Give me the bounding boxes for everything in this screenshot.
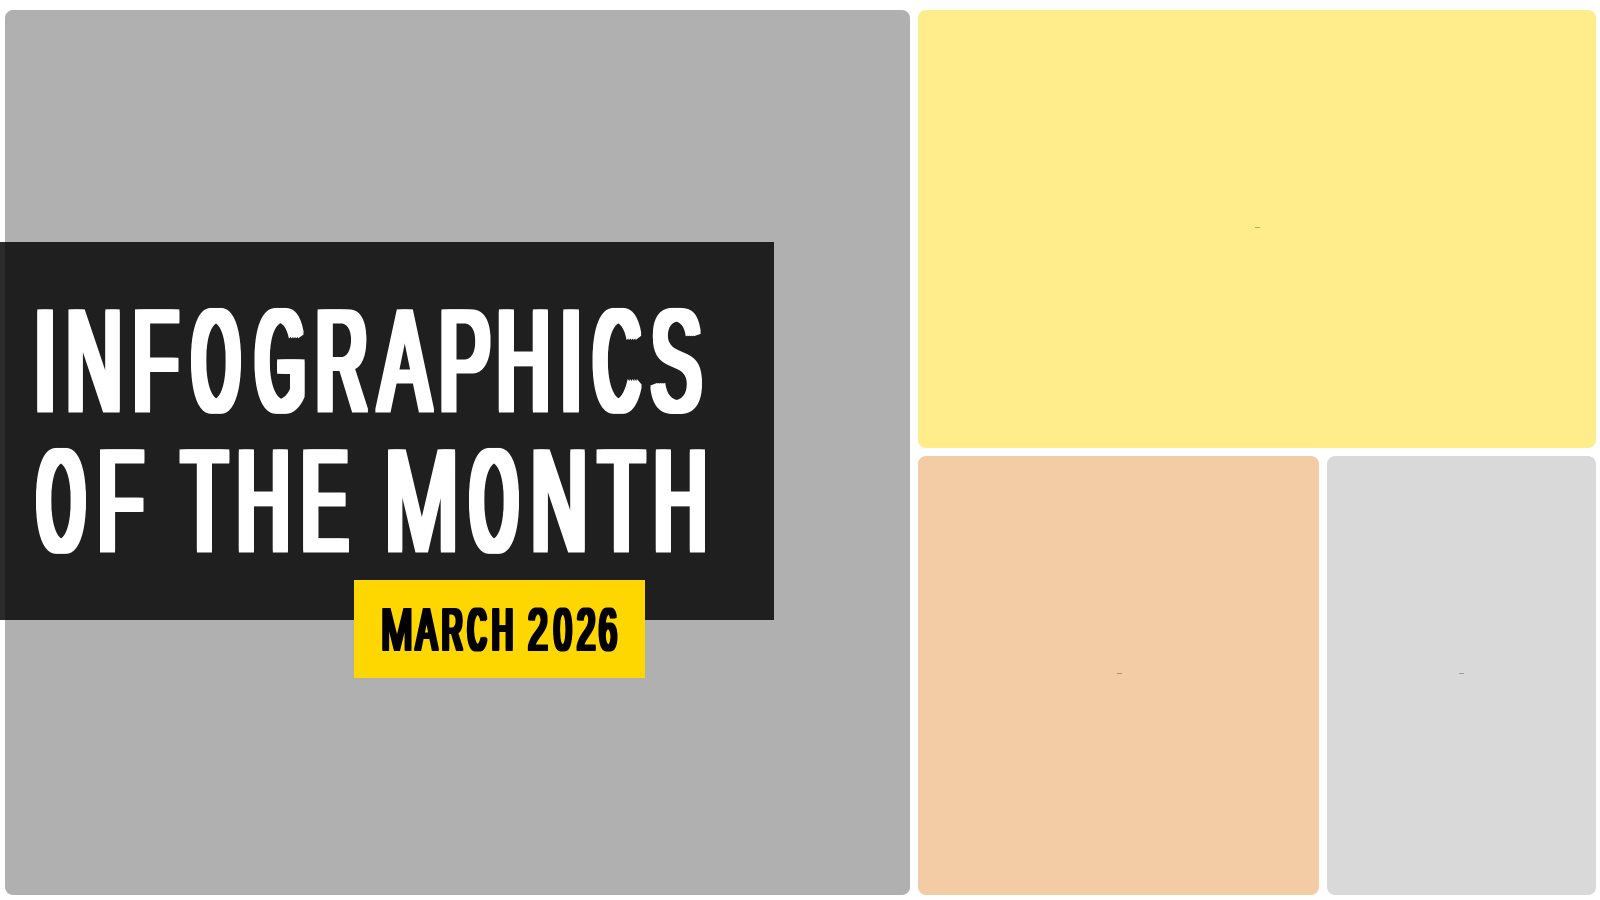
date text: H [492,596,513,663]
title line 1: G [256,279,305,442]
title line 1: I [35,279,55,442]
title line 1: H [497,279,550,442]
title line 1: A [379,279,430,442]
title line 1: N [66,279,122,442]
date text: R [442,596,462,663]
panel: yellow tile [918,10,1596,448]
title line 1: S [651,279,701,442]
title line 2: N [531,419,587,582]
yellow tile placeholder mark [1255,227,1260,228]
title line 2: H [654,419,707,582]
date text: A [416,596,437,663]
date badge [354,580,645,678]
title line 1: F [133,279,178,442]
title line 2: H [237,419,290,582]
title line 2: F [98,419,143,582]
title line 2: T [599,419,643,582]
date text: C [468,596,486,663]
date text: 2 [528,596,548,663]
title line 2: O [471,419,517,582]
panel: peach tile [918,456,1319,895]
date text: 6 [599,596,617,663]
title line 1: I [561,279,581,442]
light grey tile placeholder mark [1459,673,1464,674]
panel: grey feature tile [5,10,910,895]
title line 2: T [182,419,226,582]
title banner [0,242,774,620]
title line 2: O [38,419,84,582]
title line 1: O [193,279,239,442]
panel: light grey tile [1327,456,1596,895]
title line 1: R [316,279,368,442]
date text: 2 [577,596,596,663]
date text: M [381,596,412,663]
title line 2: M [384,419,459,582]
title line 1: C [594,279,640,442]
peach tile placeholder mark [1117,673,1122,674]
title line 2: E [302,419,347,582]
title line 1: P [439,279,490,442]
date text: 0 [554,596,571,663]
